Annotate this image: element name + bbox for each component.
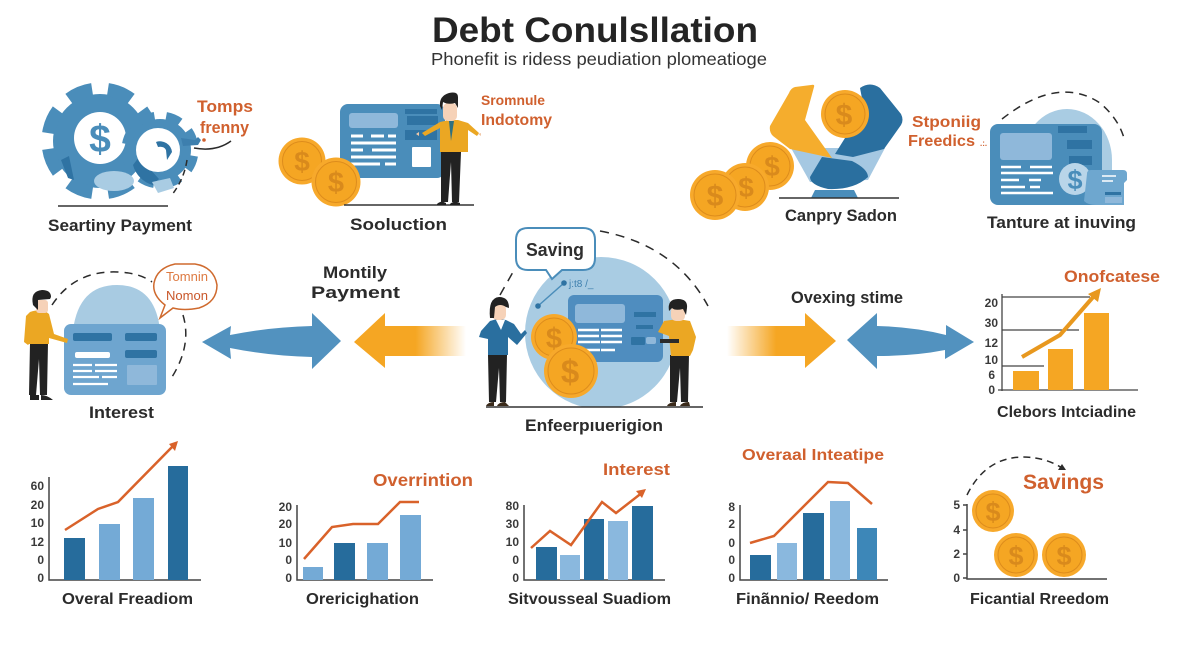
icon: large gear: $ — [89, 118, 111, 161]
callout: tomps frenny: frenny — [200, 118, 250, 137]
chart: finannio reedom: 0 — [728, 536, 735, 550]
chart: sitvousseal suadiom: 0 — [512, 571, 519, 585]
chart: orange bars: 10 — [985, 353, 998, 367]
icon: hands holding coin — [770, 84, 902, 198]
icon: hands holding coin: $ — [836, 99, 853, 132]
arrow: blue double left — [202, 313, 341, 369]
chart: overal freadiom — [31, 441, 201, 608]
panel: interest — [24, 264, 217, 422]
panel: sooluction — [278, 92, 552, 234]
heading: monthly payment: Payment — [311, 283, 400, 302]
panel: central saving illustration — [479, 228, 708, 435]
icon: dome — [1022, 109, 1112, 205]
heading: monthly payment — [311, 263, 400, 302]
label: Tanture at inuving — [987, 213, 1136, 232]
icon: card — [64, 324, 166, 395]
chart: sitvousseal suadiom: Interest — [603, 460, 670, 479]
icon: big coin — [544, 344, 598, 398]
panel: seartiny payment — [41, 82, 253, 235]
chart: finannio reedom: 0 — [728, 571, 735, 585]
callout: saving bubble — [516, 228, 595, 279]
icon: coin — [531, 314, 577, 360]
icon: small trend line: j:t8 /_ — [568, 279, 594, 290]
icon: person — [24, 290, 68, 400]
icon: coin — [278, 138, 326, 184]
chart: savings coins: $ — [1008, 541, 1024, 571]
chart: sitvousseal suadiom: 30 — [506, 517, 519, 531]
icon: circle backdrop — [525, 257, 677, 409]
label: Sooluction — [350, 215, 447, 234]
label: Seartiny Payment — [48, 216, 192, 235]
icon: coin stack: $ — [738, 172, 754, 203]
panel: canpry sadon — [690, 84, 987, 225]
chart: orericighation: 20 — [279, 517, 292, 531]
callout: tomps frenny — [197, 97, 253, 137]
heading: monthly payment: Montily — [323, 263, 388, 282]
label: Canpry Sadon — [785, 206, 897, 225]
label: Interest — [89, 403, 154, 422]
icon: big coin: $ — [561, 353, 579, 390]
callout: sromnule indotomy: Indotomy — [481, 112, 552, 129]
callout: tomps frenny: Tomps — [197, 97, 253, 116]
chart: overal freadiom: 20 — [31, 498, 44, 512]
subtitle: Phonefit is ridess peudiation plomeatioge — [431, 49, 767, 69]
icon: man with tablet — [658, 299, 696, 406]
arrow: orange left — [354, 313, 466, 368]
chart: savings coins: 2 — [953, 547, 960, 561]
chart: orericighation — [279, 470, 473, 608]
chart: finannio reedom: 2 — [728, 517, 735, 531]
chart: orange bars: 0 — [988, 383, 995, 397]
chart: orange bars: 30 — [985, 316, 998, 330]
callout: sromnule indotomy — [481, 92, 552, 129]
callout: stponiig freedics — [908, 114, 987, 150]
icon: coin stack: $ — [707, 180, 724, 213]
label: Clebors Intciadine — [997, 404, 1136, 421]
chart: finannio reedom — [728, 447, 888, 608]
chart: sitvousseal suadiom: 0 — [512, 553, 519, 567]
chart: savings coins: 5 — [953, 498, 960, 512]
icon: small gear — [121, 111, 206, 193]
icon: coin stack — [690, 142, 794, 220]
icon: small coin and card — [1059, 163, 1127, 205]
chart: orericighation: Overrintion — [373, 470, 473, 490]
chart: overal freadiom: 0 — [37, 553, 44, 567]
panel: tanture at inuving — [987, 92, 1136, 232]
chart: orericighation: 0 — [285, 571, 292, 585]
chart: savings coins: $ — [985, 497, 1001, 527]
chart: overal freadiom: 10 — [31, 516, 44, 530]
chart: finannio reedom: 0 — [728, 553, 735, 567]
chart: overal freadiom: 0 — [37, 571, 44, 585]
icon: dome — [73, 285, 160, 330]
icon: small trend line — [535, 279, 594, 309]
label: Sitvousseal Suadiom — [508, 591, 671, 608]
arrow: orange right — [727, 313, 836, 368]
chart: orange bars: Onofcatese — [1064, 268, 1160, 286]
callout: stponiig freedics: Stponiig — [912, 114, 981, 131]
chart: sitvousseal suadiom: 80 — [506, 499, 519, 513]
icon: card — [990, 124, 1102, 205]
chart: orange bars: 6 — [988, 368, 995, 382]
callout: saving bubble: Saving — [526, 240, 584, 260]
callout: tomnin nomon bubble: Nomon — [166, 289, 208, 303]
icon: presenter — [416, 92, 481, 205]
callout: sromnule indotomy: Sromnule — [481, 92, 545, 108]
chart: savings coins: Savings — [1023, 471, 1104, 494]
callout: stponiig freedics: .:. — [980, 139, 987, 148]
chart: finannio reedom: Overaal Inteatipe — [742, 447, 884, 464]
label: Orericighation — [306, 591, 419, 608]
icon: dashboard board — [340, 104, 445, 178]
chart: orericighation: 20 — [279, 500, 292, 514]
chart: sitvousseal suadiom: 10 — [506, 535, 519, 549]
chart: finannio reedom: 8 — [728, 500, 735, 514]
chart: orericighation: 10 — [279, 536, 292, 550]
icon: dashed arcs — [500, 231, 708, 306]
icon: dashed arc — [52, 272, 186, 377]
callout: tomnin nomon bubble: Tomnin — [166, 270, 208, 284]
chart: savings coins: $ — [1056, 541, 1072, 571]
icon: coin: $ — [546, 323, 562, 355]
chart: orericighation: 0 — [285, 553, 292, 567]
chart: overal freadiom: 12 — [31, 535, 44, 549]
chart: overal freadiom: 60 — [31, 479, 44, 493]
label: Finãnnio/ Reedom — [736, 591, 879, 608]
chart: savings coins — [953, 457, 1109, 608]
chart: orange bars: 12 — [985, 336, 998, 350]
title: Debt Conulsllation — [432, 11, 758, 50]
icon: card — [568, 295, 663, 362]
arrow: blue double right — [847, 313, 974, 369]
chart: orange bars: 20 — [985, 296, 998, 310]
icon: coin: $ — [328, 167, 344, 199]
connector curve — [194, 141, 231, 149]
chart: orange bars — [985, 268, 1160, 421]
label: Enfeerpıuerigion — [525, 416, 663, 435]
icon: dashed arc — [1002, 92, 1124, 138]
chart: sitvousseal suadiom — [506, 460, 671, 608]
icon: woman — [479, 297, 527, 406]
icon: coin: $ — [294, 146, 310, 177]
chart: savings coins: 4 — [953, 523, 960, 537]
label: Overal Freadiom — [62, 591, 193, 608]
callout: tomnin nomon bubble — [154, 264, 217, 318]
callout: stponiig freedics: Freedics — [908, 133, 975, 150]
heading: overing time: Ovexing stime — [791, 288, 903, 307]
icon: coin — [312, 158, 360, 206]
chart: savings coins: 0 — [953, 571, 960, 585]
icon: coin stack: $ — [764, 151, 780, 182]
icon: large gear — [41, 82, 159, 200]
icon: small coin and card: $ — [1067, 165, 1083, 195]
label: Ficantial Rreedom — [970, 591, 1109, 608]
